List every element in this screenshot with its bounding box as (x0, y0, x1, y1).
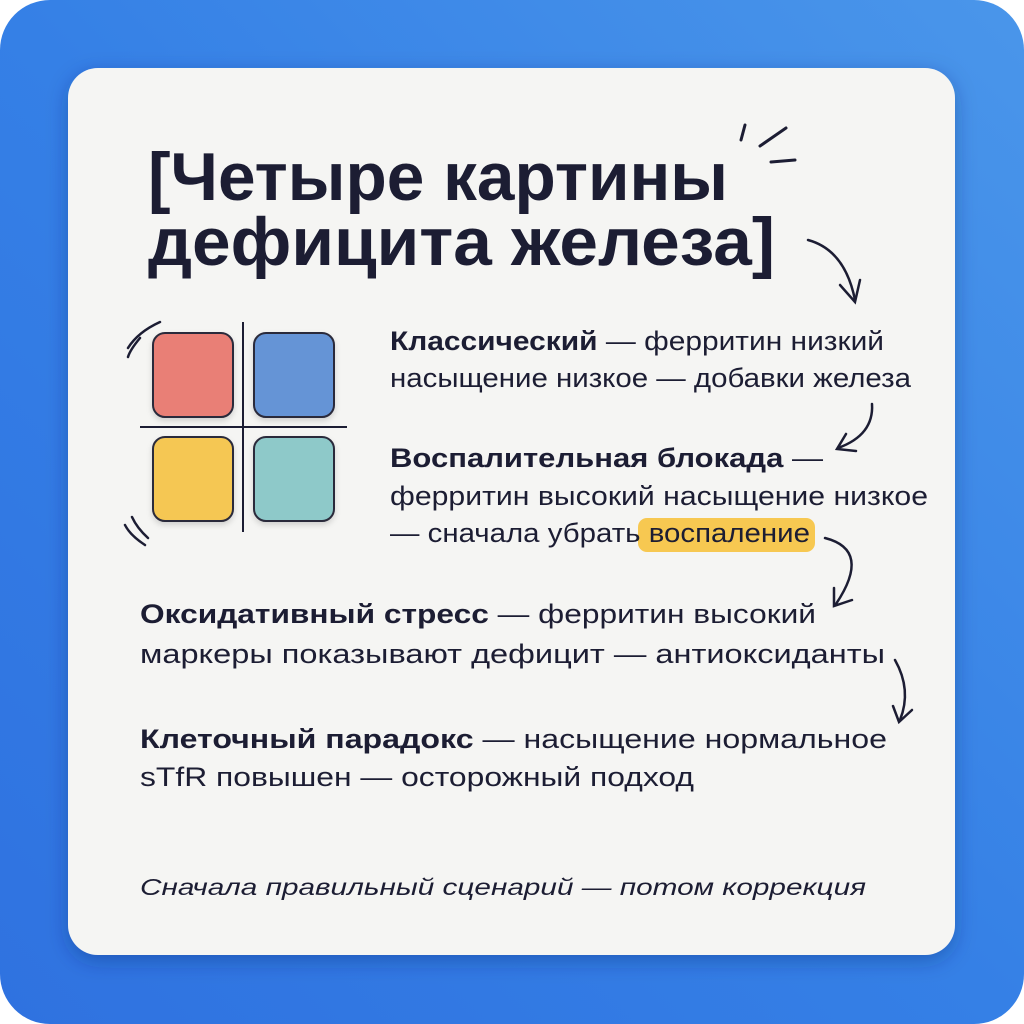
text block: inflammatory: Воспалительная блокада — (390, 443, 823, 473)
title: дефицита железа] (148, 204, 775, 280)
callout: highlight (638, 518, 815, 552)
text block: oxidative (140, 599, 885, 669)
footer: Сначала правильный сценарий — потом коррекция (140, 874, 866, 900)
icon: sparks (741, 125, 795, 162)
icon: four-square grid (125, 322, 347, 545)
arrow: title (808, 240, 860, 302)
text block: classic: насыщение низкое — добавки железа (390, 363, 912, 393)
title (148, 139, 775, 280)
title: [Четыре картины (148, 139, 728, 215)
text block: oxidative: Оксидативный стресс — ферритин высокий (140, 599, 816, 629)
card (68, 68, 955, 955)
text block: cellular (140, 724, 887, 792)
text block: classic (390, 326, 912, 393)
text block: classic: Классический — ферритин низкий (390, 326, 884, 356)
text block: inflammatory (390, 443, 928, 548)
arrow: 4 (893, 660, 912, 722)
text block: oxidative: маркеры показывают дефицит — антиоксиданты (140, 639, 885, 669)
arrow: 3 (825, 538, 852, 606)
text block: cellular: Клеточный парадокс — насыщение нормальное (140, 724, 887, 754)
arrow: 2 (837, 404, 872, 451)
text block: inflammatory: — сначала убрать воспаление (390, 518, 810, 548)
text block: cellular: sTfR повышен — осторожный подход (140, 762, 694, 792)
text block: inflammatory: ферритин высокий насыщение низкое (390, 481, 928, 511)
